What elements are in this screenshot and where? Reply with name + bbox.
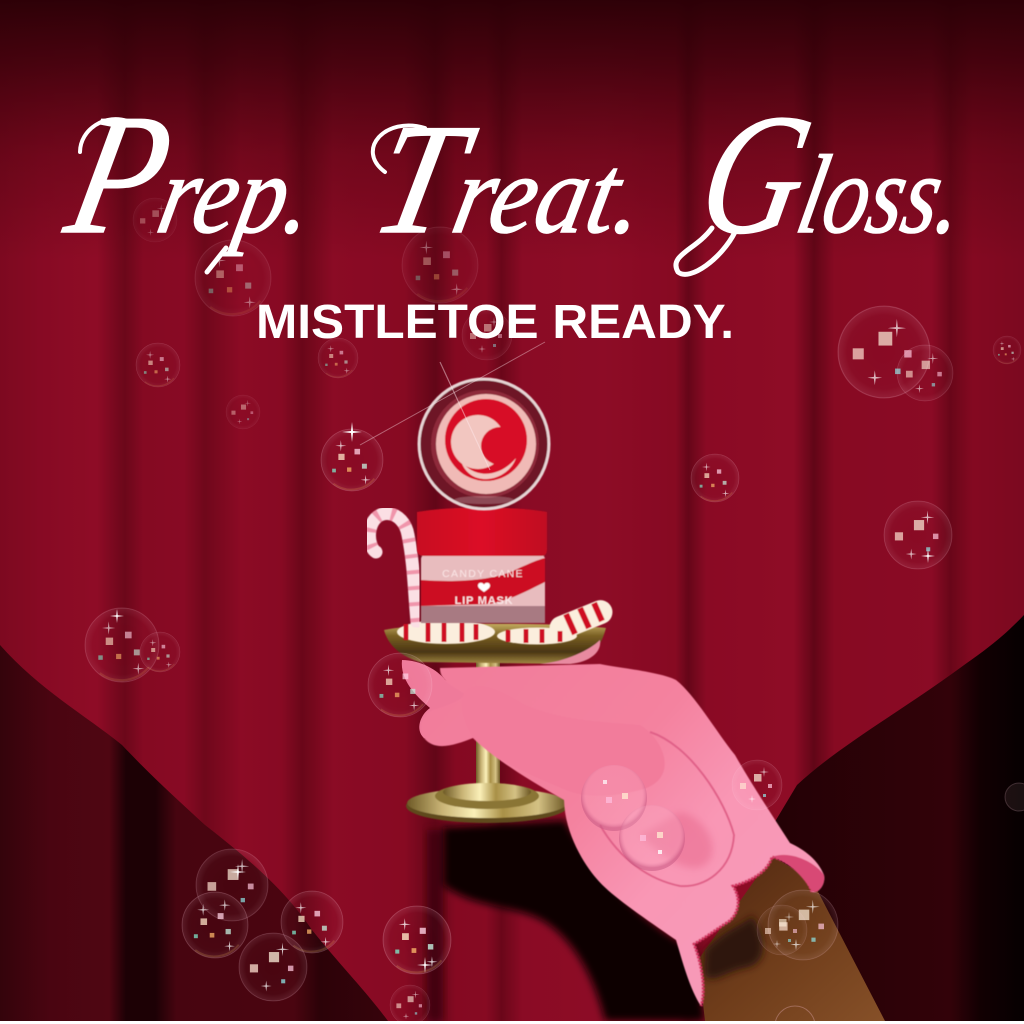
sparkles xyxy=(110,422,935,973)
lip mask jar xyxy=(417,508,547,623)
stand: stem xyxy=(476,660,500,785)
palm shadow xyxy=(640,812,713,868)
soap bubbles xyxy=(85,198,1024,1024)
candy: peppermints xyxy=(397,597,616,644)
curtain fold: dark band under stand xyxy=(427,830,443,1021)
curtain shadow: lower left xyxy=(0,645,388,1021)
arm xyxy=(698,856,885,1021)
title: Prep. Treat. Gloss. xyxy=(53,79,988,274)
jar body xyxy=(421,555,545,623)
word: Gloss.: Gloss. xyxy=(686,79,988,270)
palm stitching xyxy=(600,732,734,886)
subtitle: MISTLETOE READY.: MISTLETOE READY. xyxy=(256,296,734,349)
scalloped cuff xyxy=(694,857,812,1006)
open jar with swirl balm xyxy=(419,379,549,509)
curtain shadow: lower right xyxy=(770,615,1024,1021)
word: Prep.: Prep. xyxy=(53,79,338,270)
arm shadow xyxy=(704,915,763,979)
pink bubble on glove, lower xyxy=(619,805,685,871)
candy cane xyxy=(369,514,417,622)
thumb xyxy=(462,686,665,796)
light flare streaks xyxy=(360,342,545,470)
stand: base xyxy=(406,783,568,823)
bottom white edge xyxy=(0,1021,1024,1024)
jar lid xyxy=(417,508,547,556)
glove: back fingers xyxy=(402,660,470,738)
word: Treat.: Treat. xyxy=(361,92,666,267)
stand: plate xyxy=(384,624,606,664)
label: LIP MASK: LIP MASK xyxy=(455,595,513,607)
label: CANDY CANE: CANDY CANE xyxy=(442,568,524,580)
glove: hand xyxy=(421,664,824,1006)
decorative swashes xyxy=(80,119,735,274)
hand shadow on curtain xyxy=(443,820,705,1021)
pink bubble on glove xyxy=(581,765,647,831)
icon: heart xyxy=(478,583,490,592)
